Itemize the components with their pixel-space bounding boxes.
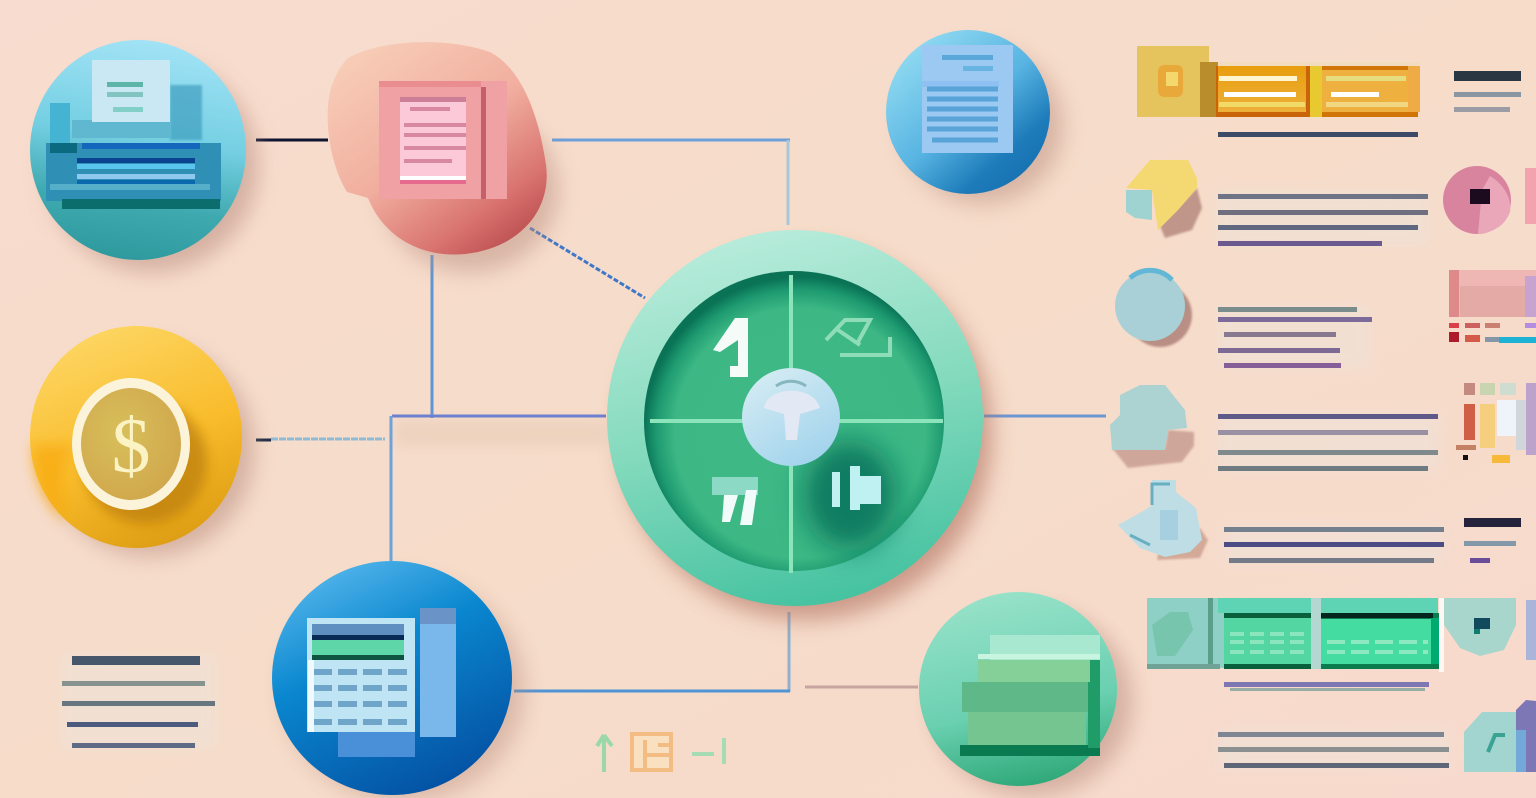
chart: colored columns xyxy=(1456,383,1536,463)
text block: row two xyxy=(1218,192,1428,246)
icon: yellow pie xyxy=(1126,160,1202,238)
card: left xyxy=(1216,66,1310,117)
text block: row five xyxy=(1224,527,1444,563)
icon: teal tile xyxy=(1147,598,1225,669)
icon: dollar coin xyxy=(72,378,207,524)
text block: bottom right xyxy=(1218,730,1449,768)
icon: yellow tile xyxy=(1137,46,1209,117)
wheel cross lines xyxy=(650,275,943,573)
center hub xyxy=(742,368,840,466)
icon: green up arrow xyxy=(597,735,612,772)
panel: yellow summary cards xyxy=(1137,46,1420,137)
icon: bottom left stand xyxy=(712,477,758,525)
icon: orange table xyxy=(632,734,672,770)
text block: top right note xyxy=(1454,71,1521,112)
icon: pale teal disc xyxy=(1115,270,1192,347)
card: left xyxy=(1224,613,1311,669)
icon: bottom right teal and blue disc xyxy=(1464,700,1536,772)
text block: row four xyxy=(1218,414,1438,471)
panel: blue calculator circle xyxy=(272,561,524,798)
icon: dollar coin: $ xyxy=(112,402,150,489)
panel: blue document circle xyxy=(886,30,1063,204)
icon: green dash xyxy=(692,738,724,764)
icon: pale blue pouch xyxy=(1118,480,1208,560)
icon: top right chart xyxy=(826,320,890,355)
connector lines xyxy=(256,140,1106,692)
icon: calculator xyxy=(307,608,456,757)
inner green disk xyxy=(644,271,944,571)
panel: yellow coin circle xyxy=(30,326,254,556)
text block: right note two xyxy=(1464,518,1521,563)
chart: palette swatches xyxy=(1449,270,1536,343)
icon: bottom right bars xyxy=(832,466,881,510)
card: right xyxy=(1321,613,1439,669)
icon: stacked ledger xyxy=(46,143,221,209)
icon: pink circle xyxy=(1443,166,1536,234)
text block: bottom left caption (illegible in reference) xyxy=(62,654,216,748)
text block: row three xyxy=(1218,306,1372,368)
icon: teal shield xyxy=(1110,385,1194,468)
bottom small icons xyxy=(597,734,724,772)
icon: pink document xyxy=(379,81,507,199)
panel: green summary cards xyxy=(1147,598,1444,691)
icon: teal circle with mark xyxy=(1444,598,1536,660)
panel: teal document circle xyxy=(30,40,258,272)
card: right xyxy=(1322,66,1420,117)
text line under cards xyxy=(1218,132,1418,137)
icon: blue page xyxy=(922,45,1013,153)
icon: top left glyph xyxy=(713,318,748,377)
panel: green stack circle xyxy=(919,592,1132,796)
icon: green folders xyxy=(960,635,1100,756)
central wheel xyxy=(607,230,992,620)
icon: paper sheet xyxy=(92,60,170,122)
text line under green cards xyxy=(1224,682,1429,687)
panel: pink document blob xyxy=(328,42,558,272)
